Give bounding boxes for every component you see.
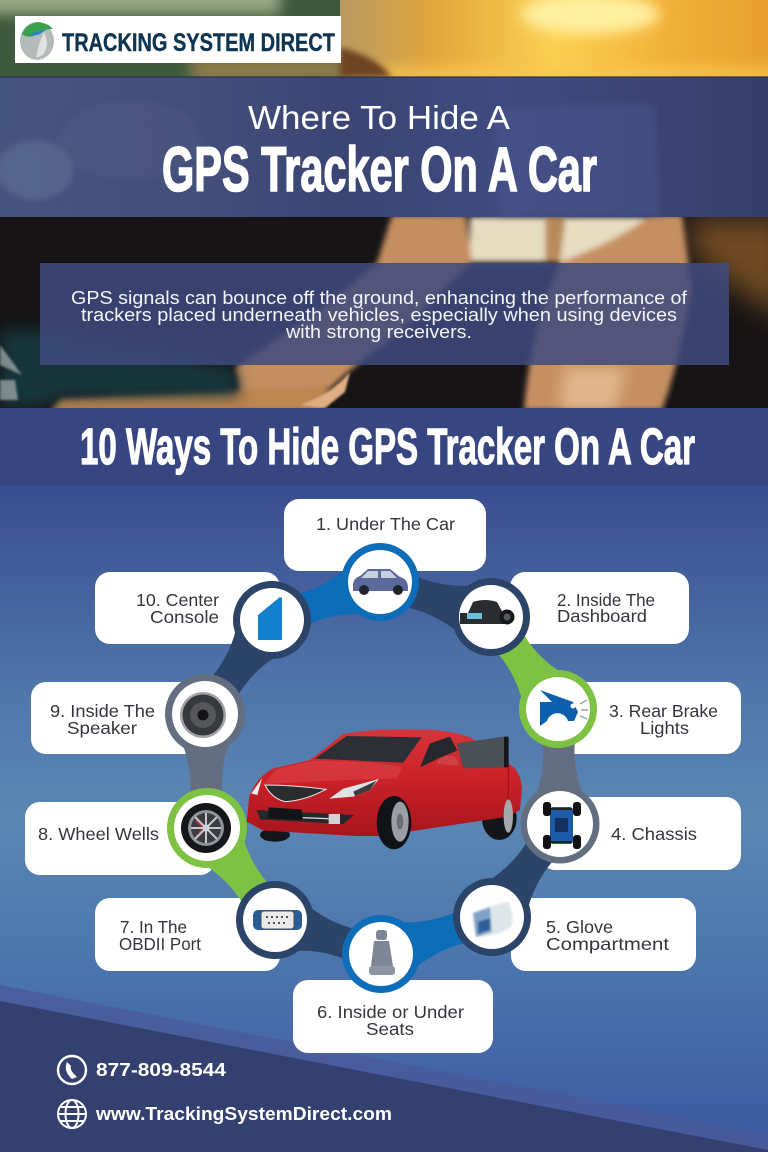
contact: phone xyxy=(58,1056,226,1084)
icon: dash camera xyxy=(460,600,514,624)
item 7: OBDII port xyxy=(119,881,314,959)
item 6: seats xyxy=(317,915,464,1039)
lower panel background xyxy=(0,485,768,1152)
icon: car seat xyxy=(369,930,395,975)
contact: website: www.TrackingSystemDirect.com xyxy=(95,1103,392,1124)
item 5: glove compartment xyxy=(453,878,669,956)
item cards xyxy=(25,499,741,1053)
item 5: glove compartment: 5. Glove xyxy=(546,917,613,937)
icon: chassis xyxy=(543,802,581,849)
item 5: glove compartment: Compartment xyxy=(546,934,669,954)
icon: glove compartment xyxy=(473,902,512,937)
intro text panel: GPS signals can bounce off the ground, enhancing the performance of xyxy=(71,287,688,308)
item 6: seats: Seats xyxy=(366,1019,414,1039)
icon: console xyxy=(258,597,282,640)
item 1: under the car xyxy=(316,514,455,621)
item 4: chassis xyxy=(520,784,697,864)
footer diagonal shape xyxy=(0,985,768,1152)
item 2: dashboard: Dashboard xyxy=(557,606,647,626)
title band xyxy=(0,76,768,217)
title line 1: Where To Hide A xyxy=(248,99,510,136)
item 6: seats: 6. Inside or Under xyxy=(317,1002,464,1022)
icon: speaker xyxy=(180,692,226,738)
logo xyxy=(15,16,341,63)
icon: OBD connector xyxy=(253,910,302,930)
contact: website xyxy=(58,1100,392,1128)
photo background: hands holding tablet in car xyxy=(0,0,768,412)
item 3: rear brake lights xyxy=(519,670,718,748)
item 9: speaker xyxy=(50,674,245,754)
item 10: center console: 10. Center xyxy=(136,590,219,610)
item 2: dashboard: 2. Inside The xyxy=(557,590,655,610)
contact: phone: 877-809-8544 xyxy=(96,1060,226,1080)
item 3: rear brake lights: 3. Rear Brake xyxy=(609,701,718,721)
item 3: rear brake lights: Lights xyxy=(640,718,689,738)
icon: car xyxy=(353,569,408,595)
item 10: center console xyxy=(136,581,311,659)
intro text panel: trackers placed underneath vehicles, especially when using devices xyxy=(81,304,677,325)
logo: TRACKING SYSTEM DIRECT xyxy=(62,29,335,57)
connector ring xyxy=(167,546,598,990)
logo globe icon xyxy=(20,22,54,60)
intro text panel xyxy=(40,263,729,365)
intro text panel: with strong receivers. xyxy=(285,321,472,342)
icon: wheel xyxy=(181,803,231,853)
item 9: speaker: 9. Inside The xyxy=(50,701,155,721)
item 8: wheel wells: 8. Wheel Wells xyxy=(38,824,159,844)
icon: globe xyxy=(58,1100,86,1128)
icon: phone xyxy=(58,1056,86,1084)
icon: brake light xyxy=(540,690,588,726)
item 1: under the car: 1. Under The Car xyxy=(316,514,455,534)
item 2: dashboard xyxy=(452,578,655,656)
item 8: wheel wells xyxy=(38,788,247,868)
item 7: OBDII port: 7. In The xyxy=(120,917,187,937)
item 9: speaker: Speaker xyxy=(67,718,137,738)
item 10: center console: Console xyxy=(150,607,219,627)
section heading band xyxy=(0,408,768,485)
item 7: OBDII port: OBDII Port xyxy=(119,934,201,954)
item 4: chassis: 4. Chassis xyxy=(611,824,697,844)
red car xyxy=(247,729,522,849)
